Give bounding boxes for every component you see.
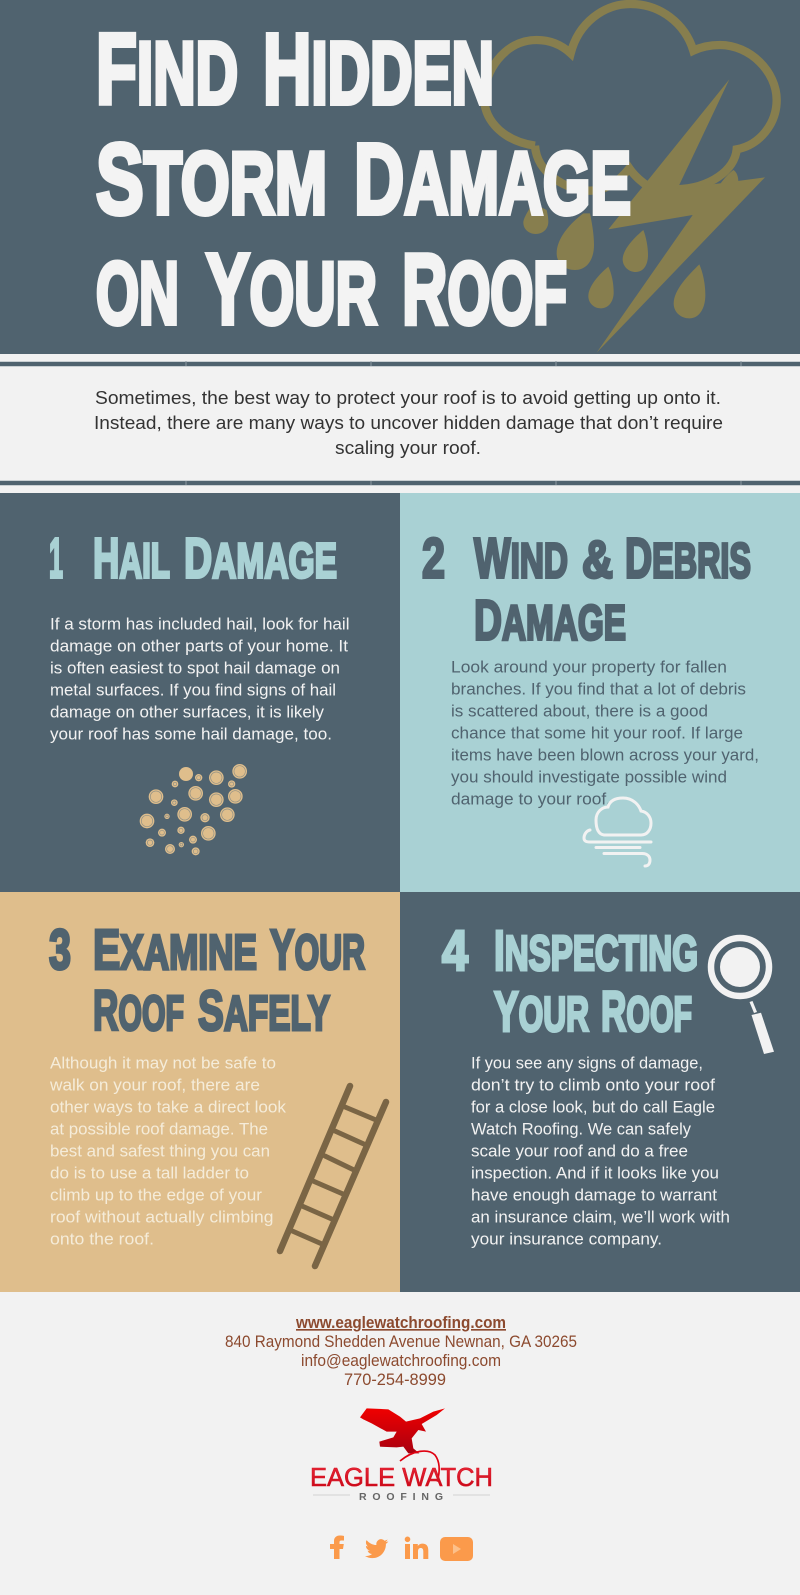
heading: 1 hail damage	[49, 526, 337, 590]
heading: 4 inspecting your roof: 4	[442, 919, 468, 983]
text: hail damage body: damage on other parts of your home. It	[50, 637, 348, 655]
text: inspecting roof body: scale your roof and do a free	[471, 1142, 688, 1160]
heading: 3 examine your roof safely	[49, 918, 365, 1043]
heading: 2 wind and debris damage: DEBRIS	[625, 526, 751, 590]
heading: 4 inspecting your roof: ROOF	[601, 980, 692, 1044]
logo wordmark: EAGLE WATCH	[310, 1462, 493, 1492]
text: hail damage body: your roof has some hail damage, too.	[50, 725, 332, 743]
heading: 1 hail damage: HAIL	[93, 526, 170, 590]
icon: red eagle	[360, 1408, 445, 1482]
title: HIDDEN	[263, 14, 494, 126]
footer contact details: 770-254-8999	[344, 1371, 446, 1389]
icon: cloud with wind	[584, 798, 651, 866]
icon: storm cloud with lightning and rain	[484, 4, 777, 353]
icon: youtube	[440, 1537, 473, 1561]
text: examine roof body	[49, 1054, 287, 1248]
text: inspecting roof body: If you see any signs of damage,	[471, 1054, 703, 1072]
intro text: Instead, there are many ways to uncover hidden damage that don’t require	[94, 412, 723, 433]
text: examine roof body: do is to use a tall ladder to	[50, 1164, 249, 1182]
title	[96, 14, 631, 346]
panel: inspecting your roof	[400, 892, 800, 1292]
text: inspecting roof body: have enough damage to warrant	[471, 1186, 717, 1204]
intro text: scaling your roof.	[335, 437, 481, 458]
heading: 3 examine your roof safely: YOUR	[270, 918, 365, 982]
footer contact details: info@eaglewatchroofing.com	[301, 1352, 501, 1370]
panel: examine your roof safely	[0, 892, 400, 1292]
icon: linkedin	[405, 1536, 428, 1559]
text: wind and debris body: chance that some hit your roof. If large	[451, 724, 743, 742]
text: examine roof body: onto the roof.	[50, 1230, 154, 1248]
text: examine roof body: at possible roof damage. The	[50, 1120, 268, 1138]
title: DAMAGE	[354, 124, 631, 236]
text: wind and debris body: Look around your property for fallen	[451, 658, 727, 676]
heading: 4 inspecting your roof: INSPECTING	[494, 919, 698, 983]
text: examine roof body: roof without actually climbing	[50, 1208, 274, 1226]
title: ON	[96, 244, 179, 342]
text: examine roof body: Although it may not be safe to	[50, 1054, 276, 1072]
text: inspecting roof body: for a close look, but do call Eagle	[471, 1098, 715, 1116]
text: wind and debris body	[451, 658, 759, 808]
heading: 2 wind and debris damage: &	[582, 530, 613, 590]
intro text	[94, 387, 723, 458]
logo: eagle watch roofing	[310, 1408, 493, 1503]
text: wind and debris body: items have been blown across your yard,	[451, 746, 759, 764]
heading: 2 wind and debris damage: 2	[422, 526, 445, 590]
heading: 2 wind and debris damage: DAMAGE	[474, 588, 626, 652]
footer contact details: 840 Raymond Shedden Avenue Newnan, GA 30265	[225, 1333, 577, 1351]
footer contact details	[225, 1314, 577, 1389]
panel: hail damage	[0, 493, 400, 892]
heading: 1 hail damage: DAMAGE	[184, 526, 337, 590]
heading: 3 examine your roof safely: SAFELY	[198, 979, 330, 1043]
text: examine roof body: other ways to take a direct look	[50, 1098, 287, 1116]
title: FIND	[96, 14, 238, 126]
text: hail damage body: damage on other surfaces, it is likely	[50, 703, 325, 721]
heading: 3 examine your roof safely: 3	[49, 918, 71, 982]
text: inspecting roof body: inspection. And if it looks like you	[471, 1164, 719, 1182]
text: hail damage body	[50, 615, 350, 743]
text: wind and debris body: damage to your roof.	[451, 790, 611, 808]
text: inspecting roof body: don’t try to climb onto your roof	[471, 1076, 715, 1094]
icon: magnifying glass	[711, 938, 774, 1054]
text: inspecting roof body: Watch Roofing. We can safely	[471, 1120, 692, 1138]
intro text: Sometimes, the best way to protect your roof is to avoid getting up onto it.	[95, 387, 721, 408]
text: wind and debris body: you should investigate possible wind	[451, 768, 727, 786]
panel: wind and debris damage	[400, 493, 800, 892]
text: examine roof body: climb up to the edge of your	[50, 1186, 263, 1204]
heading: 3 examine your roof safely: EXAMINE	[93, 918, 257, 982]
title: YOUR	[206, 234, 377, 346]
text: examine roof body: best and safest thing you can	[50, 1142, 270, 1160]
heading: 3 examine your roof safely: ROOF	[93, 979, 184, 1043]
heading: 1 hail damage: 1	[49, 526, 63, 590]
logo subtitle: ROOFING	[359, 1491, 443, 1503]
text: hail damage body: If a storm has included hail, look for hail	[50, 615, 350, 633]
icon: twitter	[365, 1539, 388, 1558]
title: STORM	[96, 124, 327, 236]
icon: ladder	[280, 1086, 386, 1266]
icon: facebook	[330, 1536, 344, 1559]
heading: 4 inspecting your roof	[442, 919, 698, 1044]
text: wind and debris body: is scattered about, there is a good	[451, 702, 708, 720]
text: inspecting roof body: your insurance company.	[471, 1230, 662, 1248]
heading: 4 inspecting your roof: YOUR	[494, 980, 589, 1044]
heading: 2 wind and debris damage: WIND	[474, 526, 568, 590]
text: inspecting roof body	[471, 1054, 730, 1248]
icon: hailstones	[140, 764, 247, 855]
text: inspecting roof body: an insurance claim, we’ll work with	[471, 1208, 730, 1226]
text: examine roof body: walk on your roof, there are	[49, 1076, 260, 1094]
footer contact details: www.eaglewatchroofing.com	[295, 1314, 506, 1332]
social icons	[330, 1536, 473, 1561]
text: wind and debris body: branches. If you find that a lot of debris	[451, 680, 746, 698]
text: hail damage body: metal surfaces. If you find signs of hail	[50, 681, 336, 699]
text: hail damage body: is often easiest to spot hail damage on	[50, 659, 340, 677]
heading: 2 wind and debris damage	[422, 526, 751, 652]
header banner	[0, 0, 800, 354]
title: ROOF	[402, 234, 567, 346]
